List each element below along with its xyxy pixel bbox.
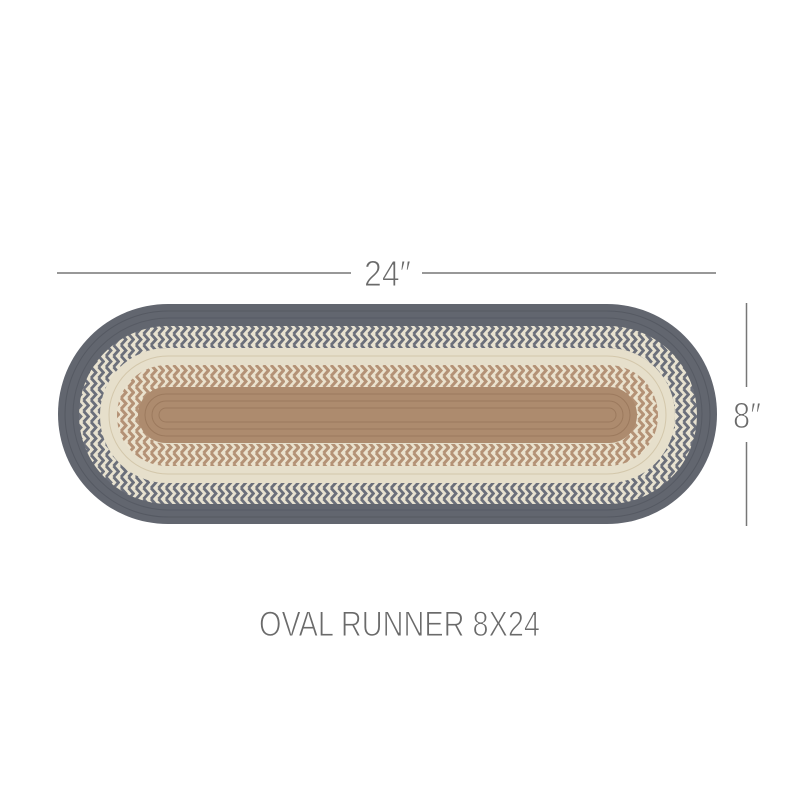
cream band: [100, 348, 675, 483]
grey tweed band: [90, 337, 686, 493]
tan centre: [138, 387, 637, 443]
caption: OVAL RUNNER 8X24: [259, 605, 540, 644]
outer grey band: [58, 304, 717, 524]
braided oval runner rug: [58, 304, 717, 524]
height label: 8″: [733, 395, 761, 436]
width label: 24″: [364, 253, 411, 294]
tan tweed band: [128, 376, 647, 455]
